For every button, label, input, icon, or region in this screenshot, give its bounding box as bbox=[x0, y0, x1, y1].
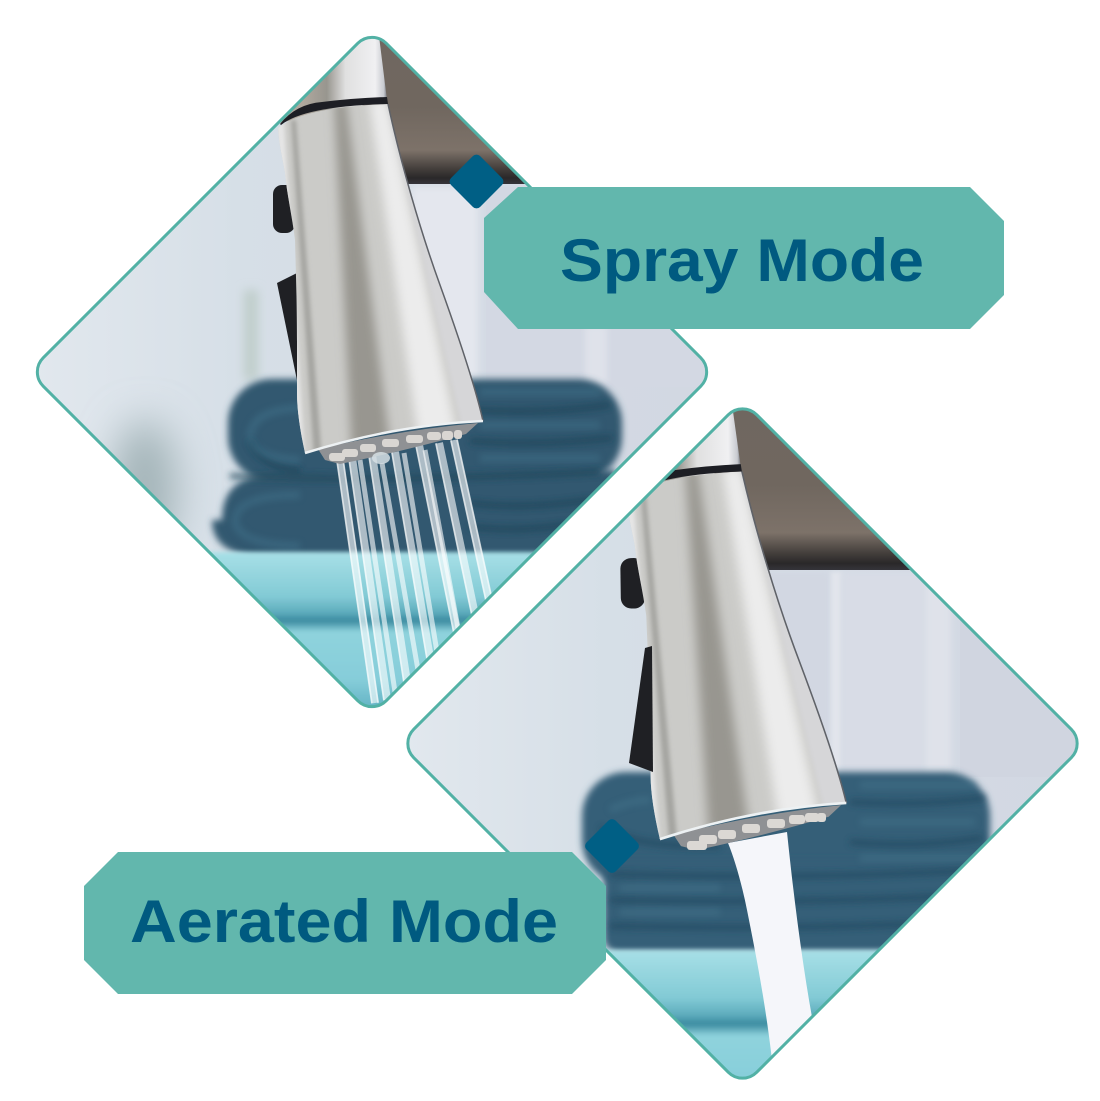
towels: light teal stack bbox=[210, 549, 536, 706]
faucet nozzles bbox=[687, 813, 826, 850]
panel outline bbox=[29, 29, 715, 715]
icon: aerated accent diamond bbox=[583, 817, 641, 875]
label: spray mode bbox=[484, 187, 1004, 329]
panel outline bbox=[400, 401, 1085, 1086]
panel: spray mode photo bbox=[29, 20, 720, 720]
heading: spray mode: Spray Mode bbox=[560, 227, 924, 294]
aerated water stream bbox=[728, 832, 812, 1060]
towels: light teal stack bbox=[607, 947, 880, 1077]
water streams bbox=[337, 440, 492, 703]
faucet head bbox=[618, 461, 854, 851]
towels: dark teal stack bbox=[582, 772, 990, 952]
faucet head bbox=[270, 95, 490, 464]
faucet group bbox=[620, 413, 847, 850]
faucet neck bbox=[664, 413, 740, 482]
towels: dark teal stack bbox=[212, 379, 622, 560]
heading: aerated mode: Aerated Mode bbox=[130, 888, 558, 955]
faucet neck bbox=[280, 38, 386, 123]
photo scene: spray faucet bbox=[30, 20, 720, 720]
panel: aerated mode photo bbox=[400, 382, 1090, 1101]
faucet button bbox=[620, 558, 645, 609]
faucet trigger bbox=[629, 646, 653, 772]
photo scene: aerated faucet bbox=[409, 410, 1076, 1077]
label: aerated mode bbox=[84, 852, 606, 994]
icon: spray accent diamond bbox=[448, 153, 505, 210]
faucet buttons bbox=[273, 185, 297, 380]
